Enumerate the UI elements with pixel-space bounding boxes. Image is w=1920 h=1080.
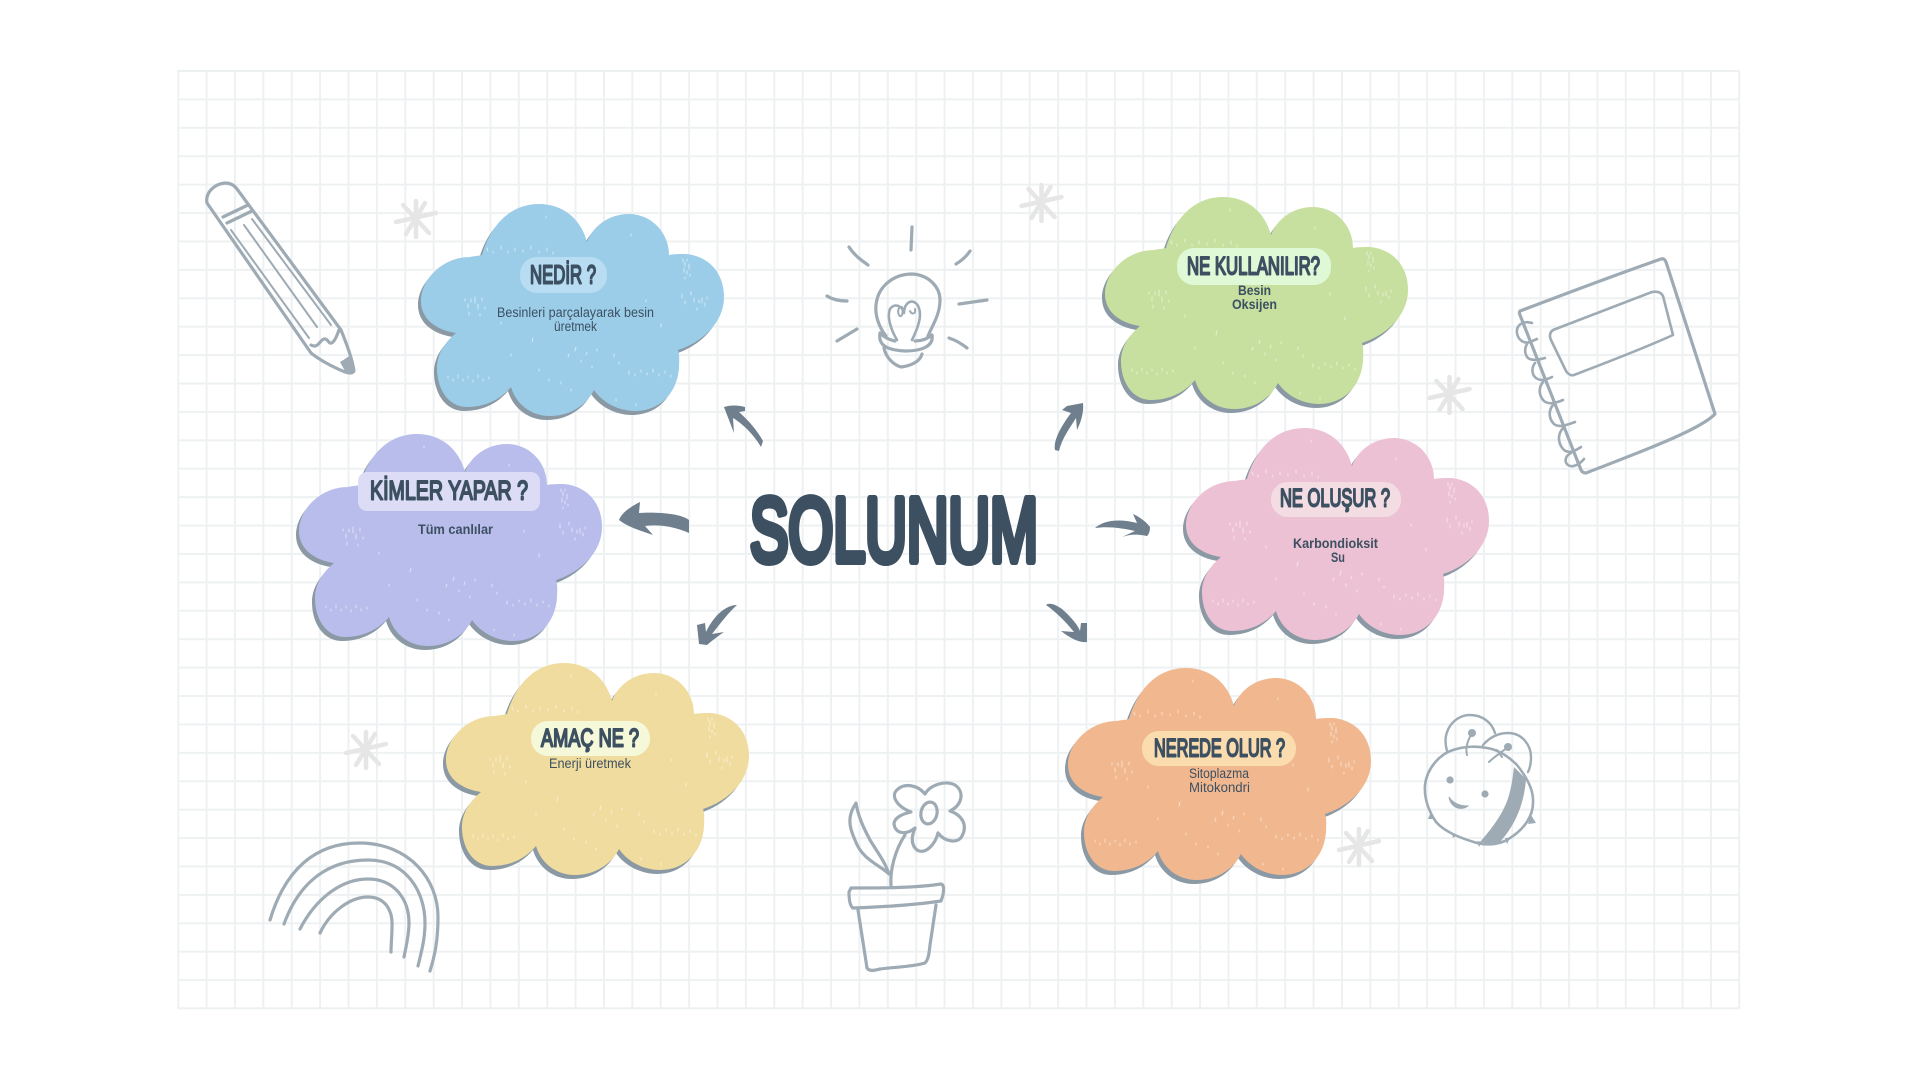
icon: notebook — [1517, 259, 1715, 473]
text: nedir: üretmek — [554, 319, 597, 334]
icon: pencil — [207, 183, 354, 373]
arrow: to NEDİR — [724, 406, 763, 447]
icon: asterisk right — [1430, 377, 1470, 413]
arrow: to KİMLER YAPAR — [619, 502, 689, 535]
text: kimler yapar: Tüm canlılar — [418, 522, 494, 537]
icon: asterisk left — [346, 732, 386, 768]
icon: rainbow — [270, 843, 438, 971]
text: ne olusur: Su — [1331, 550, 1345, 565]
heading chip: amac ne — [531, 721, 650, 756]
text: ne kullanilir: Oksijen — [1232, 297, 1277, 312]
panel: kimler yapar — [296, 434, 602, 650]
heading chip: nedir — [520, 257, 607, 293]
panel: ne kullanilir — [1102, 197, 1408, 413]
text: ne olusur: Karbondioksit — [1293, 536, 1378, 551]
panel: amac ne — [443, 663, 749, 879]
panel: ne olusur — [1183, 428, 1489, 644]
panel: nerede olur — [1065, 668, 1371, 884]
text: ne kullanilir — [1232, 283, 1277, 312]
text: ne kullanilir: Besin — [1238, 283, 1271, 298]
heading chip: nerede olur: NEREDE OLUR ? — [1154, 734, 1285, 762]
heading chip: kimler yapar — [358, 472, 540, 511]
panel: nedir — [418, 204, 724, 420]
arrow: to AMAÇ NE — [697, 605, 737, 645]
icon: asterisk top left — [396, 201, 436, 237]
text: ne olusur — [1293, 536, 1378, 565]
icon: light bulb — [827, 227, 987, 367]
text: amac ne: Enerji üretmek — [549, 756, 631, 771]
text: nerede olur: Mitokondri — [1189, 780, 1250, 795]
heading chip: ne kullanilir — [1177, 248, 1331, 285]
heading chip: ne olusur — [1271, 482, 1401, 517]
text: nerede olur: Sitoplazma — [1189, 766, 1249, 781]
icon: asterisk top centre — [1022, 185, 1062, 221]
arrow: to NE KULLANILIR — [1055, 403, 1083, 451]
heading chip: amac ne: AMAÇ NE ? — [541, 724, 639, 752]
heading chip: nedir: NEDİR ? — [530, 260, 596, 290]
heading chip: ne olusur: NE OLUŞUR ? — [1280, 484, 1390, 512]
heading chip: nerede olur — [1142, 731, 1296, 766]
text: nedir: Besinleri parçalayarak besin — [497, 305, 654, 320]
icon: flower pot — [849, 783, 964, 970]
text: nerede olur — [1189, 766, 1250, 795]
icon: bee — [1425, 715, 1536, 847]
arrow: to NE OLUŞUR — [1095, 514, 1150, 537]
title: SOLUNUM — [750, 481, 1038, 581]
heading chip: kimler yapar: KİMLER YAPAR ? — [370, 474, 528, 506]
icon: asterisk bottom right — [1339, 829, 1379, 865]
heading chip: ne kullanilir: NE KULLANILIR? — [1187, 252, 1320, 280]
text: nedir — [497, 305, 654, 334]
arrow: to NEREDE OLUR — [1046, 604, 1087, 642]
